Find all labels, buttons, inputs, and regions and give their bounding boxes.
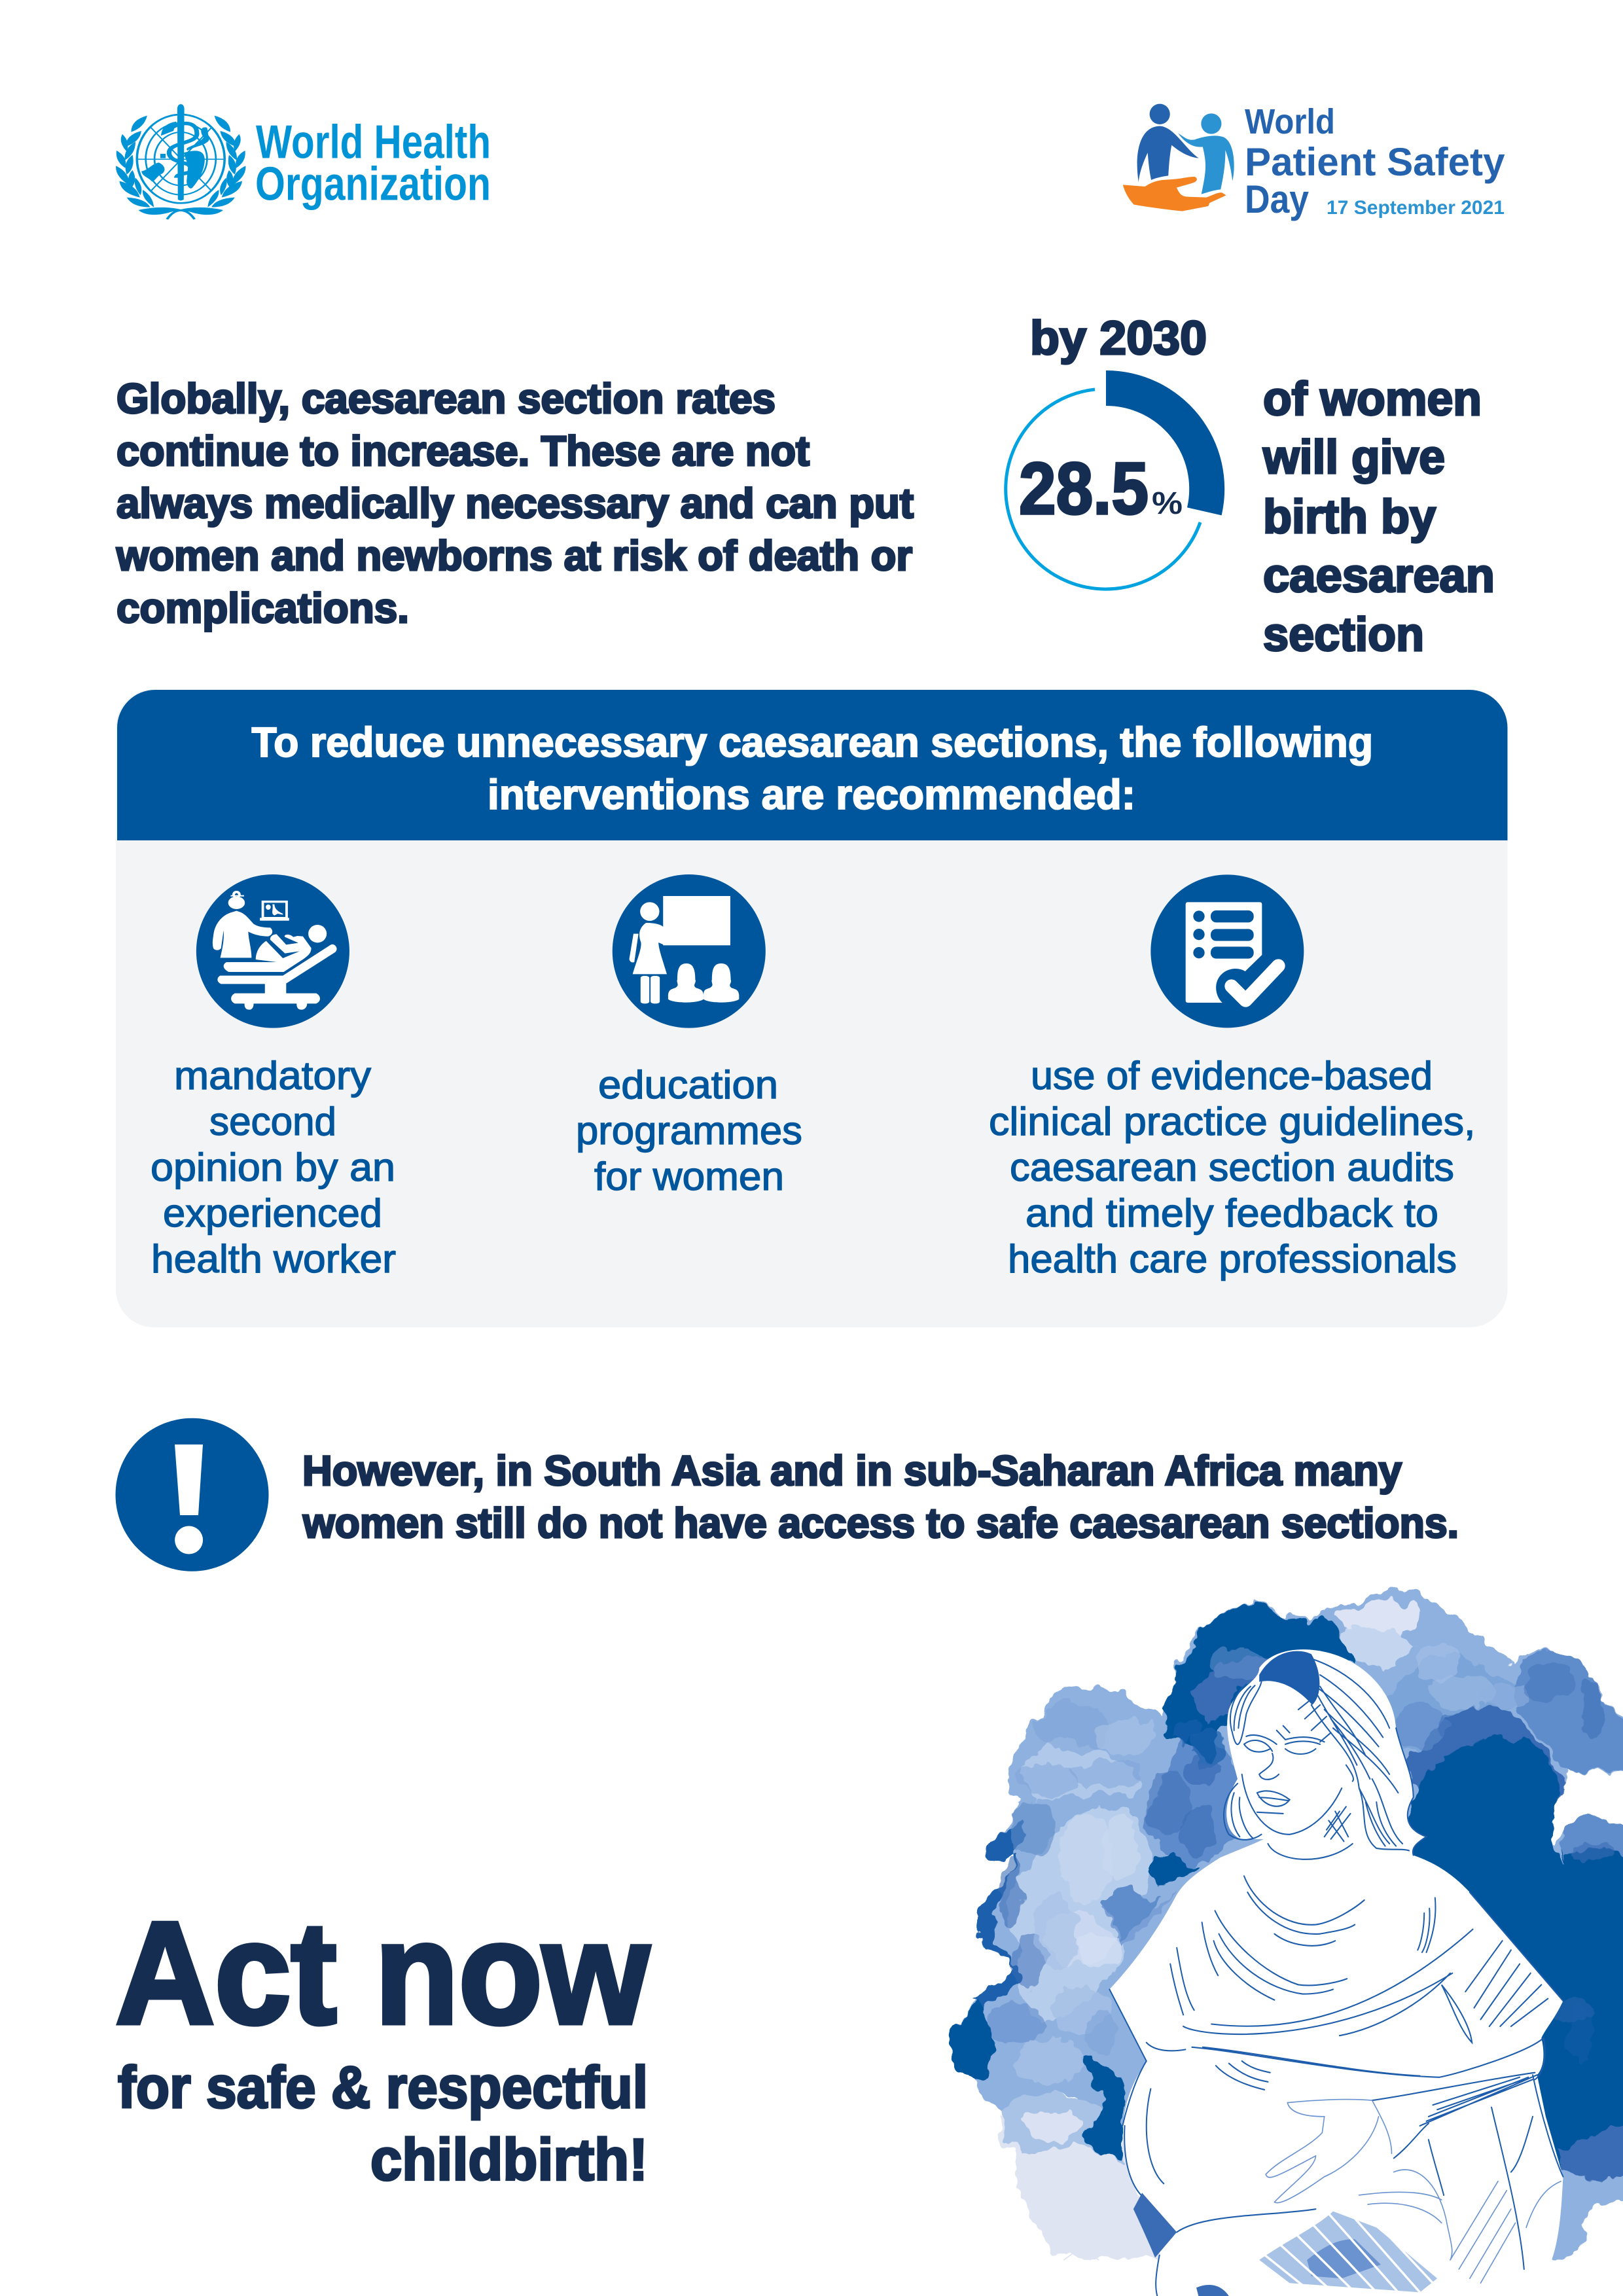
statistic description: caesarean [1263, 550, 1495, 602]
label: mandatory second opinion: second [209, 1100, 336, 1143]
logo wordmark: Day [1245, 177, 1310, 221]
intro paragraph: Globally, caesarean section rates [116, 375, 776, 422]
logo wordmark: World Health Organization: World Health [256, 117, 491, 169]
icon: doctor examining patient on bed [196, 874, 349, 1028]
logo wordmark: World Health Organization: Organization [255, 158, 491, 211]
woman: hair mass [1259, 1651, 1319, 1705]
percentage value: % [1152, 486, 1183, 521]
heading: Act now: Act now [115, 1892, 650, 2054]
label: guidelines, audits and feedback: and timely feedback to [1026, 1191, 1438, 1235]
intro paragraph: always medically necessary and can put [116, 480, 914, 527]
label: mandatory second opinion: experienced [163, 1191, 382, 1235]
alert text [302, 1447, 1459, 1547]
donut chart: 28.5 percent [1006, 370, 1224, 589]
intro paragraph: continue to increase. These are not [116, 427, 810, 475]
logo wordmark [1245, 102, 1505, 221]
icon: exclamation mark [115, 1418, 268, 1571]
label: education programmes: programmes [576, 1109, 802, 1153]
woman: hand and skirt lighter lines [1044, 2100, 1561, 2283]
alert text: However, in South Asia and in sub-Saharan Africa many [302, 1447, 1402, 1494]
subheading [118, 2055, 648, 2193]
label: education programmes: for women [594, 1155, 784, 1198]
label: guidelines, audits and feedback: health care professionals [1008, 1237, 1457, 1281]
logo wordmark: World Health Organization [255, 117, 491, 211]
label: guidelines, audits and feedback: clinical practice guidelines, [989, 1100, 1475, 1143]
illustration: pregnant woman on watercolour [949, 1589, 1623, 2296]
logo wordmark: Patient Safety [1245, 140, 1505, 184]
by 2030 label: by 2030 [1030, 312, 1207, 365]
alert text: women still do not have access to safe caesarean sections. [302, 1499, 1459, 1547]
icon: checklist document with tick [1150, 874, 1304, 1028]
intro paragraph: women and newborns at risk of death or [116, 532, 912, 579]
label: education programmes [576, 1063, 802, 1198]
label: mandatory second opinion: opinion by an [151, 1145, 395, 1189]
statistic description: will give [1262, 431, 1445, 484]
icon: teacher at board with women [613, 874, 766, 1028]
alert: access to safe caesarean sections [115, 1418, 1459, 1571]
label: mandatory second opinion: mandatory [174, 1054, 371, 1098]
statistic description: birth by [1263, 491, 1436, 543]
label: mandatory second opinion: health worker [151, 1237, 396, 1281]
label: mandatory second opinion [151, 1054, 396, 1281]
statistic description: of women [1263, 373, 1482, 425]
panel: recommended interventions [116, 689, 1508, 1327]
label: guidelines, audits and feedback [989, 1054, 1475, 1281]
label: education programmes: education [598, 1063, 778, 1107]
panel header: To reduce unnecessary caesarean sections, the following [251, 719, 1373, 766]
label: guidelines, audits and feedback: caesarean section audits [1010, 1145, 1454, 1189]
woman: skirt shading [1133, 2193, 1442, 2296]
subheading: for safe & respectful [118, 2055, 648, 2121]
World Patient Safety Day logo [1123, 102, 1505, 221]
logo wordmark: 17 September 2021 [1327, 197, 1505, 219]
icon: two people and caring hand [1123, 104, 1234, 211]
label: guidelines, audits and feedback: use of evidence-based [1031, 1054, 1433, 1098]
woman silhouette [1109, 1649, 1563, 2296]
woman: sketch lines [1109, 1659, 1563, 2296]
percentage value: 28.5 [1019, 448, 1149, 529]
logo wordmark: World [1245, 102, 1335, 141]
subheading: childbirth! [370, 2128, 648, 2193]
intro paragraph: complications. [116, 584, 409, 632]
statistic description: section [1263, 609, 1424, 661]
statistic: 28.5% by 2030 [1006, 312, 1495, 661]
call to action [115, 1892, 650, 2193]
icon: WHO emblem [116, 104, 245, 219]
WHO logo [116, 104, 491, 219]
watercolour background [949, 1589, 1623, 2260]
panel header: interventions are recommended: [488, 771, 1135, 818]
statistic description [1262, 373, 1495, 661]
panel header [117, 690, 1508, 840]
intro paragraph [116, 375, 914, 632]
